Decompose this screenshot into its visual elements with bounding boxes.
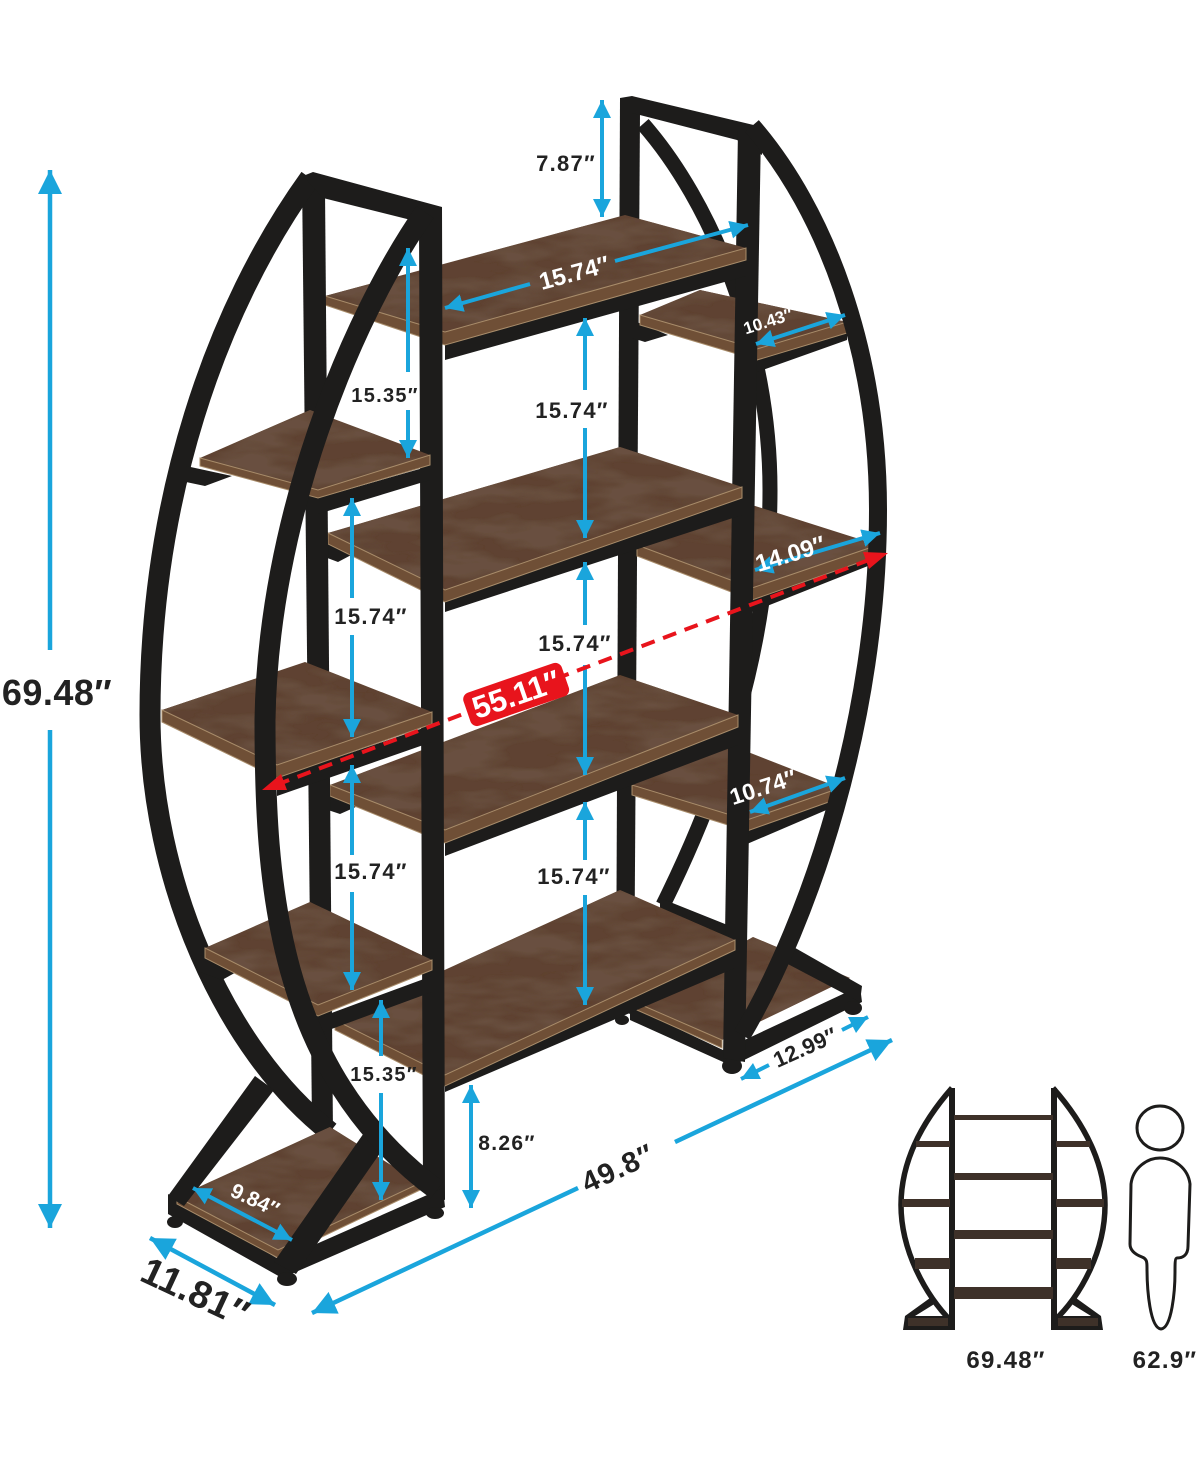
dimension: 9.84 <box>193 1179 292 1240</box>
dimension: 10.43 <box>741 305 845 344</box>
main shelf unit <box>150 96 878 1286</box>
dimension: depth 11.81: 11.81″ <box>134 1250 256 1336</box>
right tower back frame <box>616 99 770 1015</box>
dimension: overall height 69.48: 69.48″ <box>2 672 112 713</box>
dimension: overall width 49.8 <box>312 1040 892 1313</box>
dimension: centre 15.74 two: 15.74″ <box>538 631 612 656</box>
dimension: 14.09: 14.09″ <box>752 531 829 578</box>
dimension: shelf width 15.74 <box>445 225 748 308</box>
dimension: left 15.74 two: 15.74″ <box>334 859 408 884</box>
dimension: 14.09 <box>752 531 880 578</box>
label: shelf height 69.48: 69.48″ <box>966 1347 1046 1374</box>
left side shelves <box>162 410 432 1034</box>
thumbnail posts <box>949 1088 955 1330</box>
centre shelves <box>322 215 746 1092</box>
dimension: 15.35 lower left: 15.35″ <box>350 1064 418 1086</box>
thumbnail side shelves <box>902 1141 1104 1269</box>
left tower front post <box>303 172 445 1200</box>
dimension: 15.35 upper left: 15.35″ <box>351 385 419 407</box>
right base shelf <box>615 937 862 1074</box>
left base shelf <box>167 1076 445 1286</box>
dimension: 12.99: 12.99″ <box>769 1022 841 1073</box>
dimension: 9.84: 9.84″ <box>227 1179 283 1222</box>
thumbnail arcs <box>901 1088 1105 1322</box>
dimension: 8.26: 8.26″ <box>478 1132 536 1155</box>
dimension: 12.99 <box>741 1017 868 1079</box>
dimension: top 7.87: 7.87″ <box>536 151 596 176</box>
dimension: diagonal 55.11: 55.11″ <box>468 663 565 726</box>
left tower frame back and outer arc <box>150 176 333 1135</box>
dimension: top 7.87 <box>536 100 602 217</box>
right side shelves <box>632 290 878 844</box>
dimension: shelf width 15.74: 15.74″ <box>536 251 613 296</box>
left inner arc <box>265 212 437 1190</box>
thumbnail: shelf front view <box>901 1088 1105 1330</box>
thumbnail bases <box>903 1298 1103 1330</box>
label: person height 62.9: 62.9″ <box>1133 1347 1197 1374</box>
thumbnail centre shelves <box>954 1115 1053 1299</box>
dimension: centre 15.74 one: 15.74″ <box>535 398 609 423</box>
dimension: centre 15.74 three: 15.74″ <box>537 864 611 889</box>
dimension: 8.26 <box>471 1085 536 1208</box>
dimension: 10.74: 10.74″ <box>726 764 800 810</box>
icon: human outline <box>1130 1106 1190 1329</box>
dimension: 10.74 <box>726 764 845 812</box>
dimension: 10.43: 10.43″ <box>741 305 795 338</box>
dimension: diagonal 55.11 <box>262 552 888 790</box>
dimension: overall width 49.8: 49.8″ <box>577 1138 660 1200</box>
dimension: left 15.74 one: 15.74″ <box>334 604 408 629</box>
right tower front frame <box>620 96 878 1062</box>
